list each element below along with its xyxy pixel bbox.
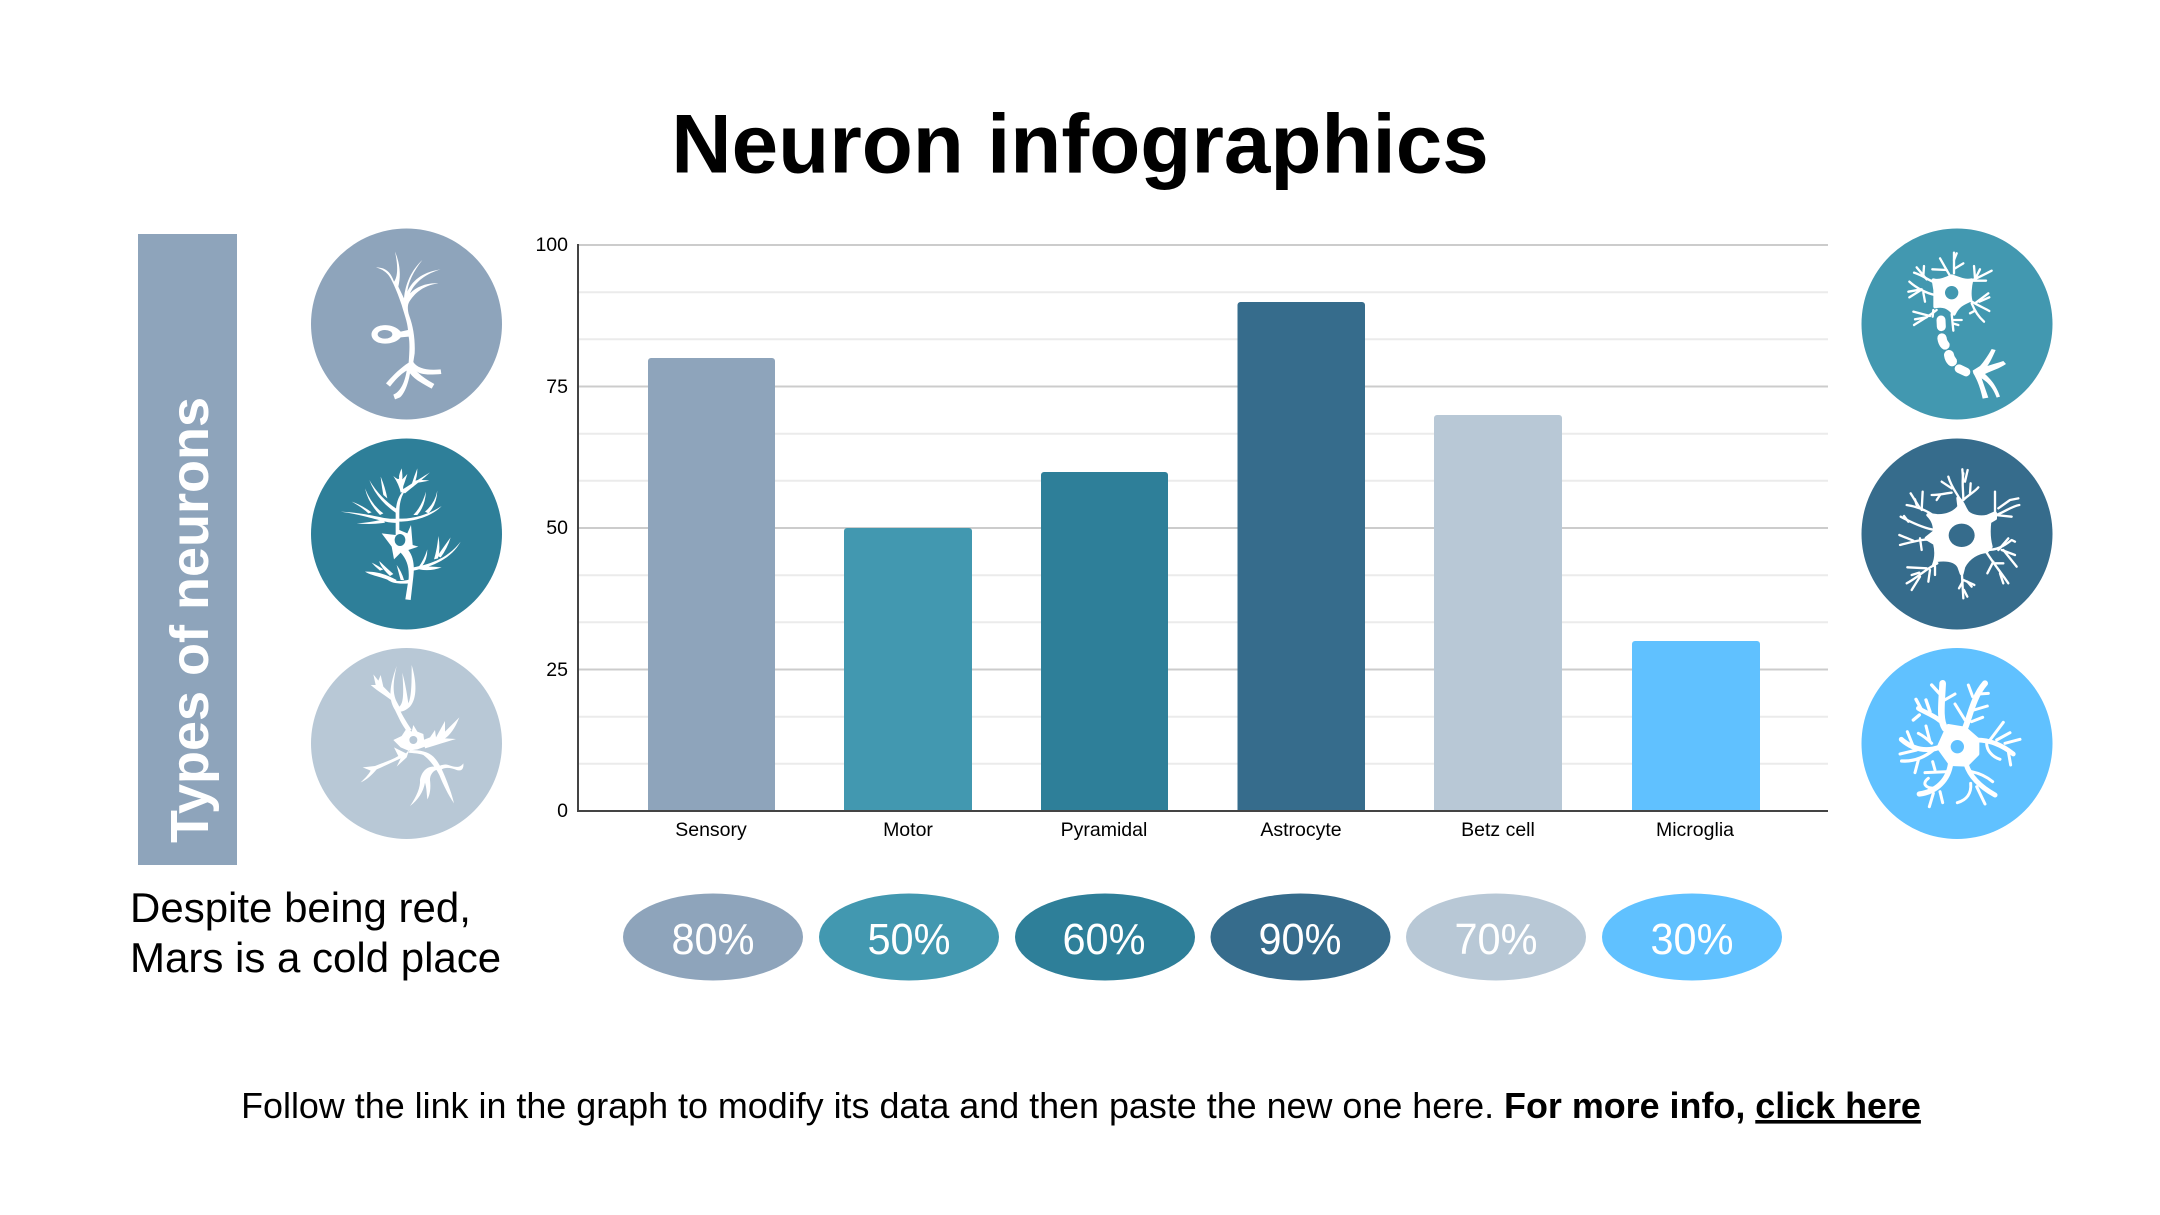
badge: 90%: 90% xyxy=(1258,915,1342,964)
icon: microglia xyxy=(1862,648,2052,839)
text block: Mars note xyxy=(130,884,501,981)
y axis labels: 25 xyxy=(546,659,568,681)
bar: Betz cell 70 xyxy=(1434,415,1562,811)
x axis labels: Motor xyxy=(883,819,933,841)
x axis labels: Microglia xyxy=(1656,819,1734,841)
text block: Mars note: Despite being red, xyxy=(130,884,471,931)
badge: 30%: 30% xyxy=(1650,915,1734,964)
x axis labels: Betz cell xyxy=(1461,819,1535,841)
bar: Astrocyte 90 xyxy=(1238,302,1365,811)
icon: betz cell xyxy=(311,648,502,839)
text block: Mars note: Mars is a cold place xyxy=(130,934,501,981)
bar: Motor 50 xyxy=(844,528,972,811)
footer text: Follow the link in the graph to modify its data and then paste the new one here. For more info, click here xyxy=(241,1086,1921,1126)
icon: sensory neuron xyxy=(311,228,502,420)
y axis labels: 100 xyxy=(535,234,568,256)
icon: astrocyte xyxy=(1862,438,2052,630)
x axis labels: Pyramidal xyxy=(1061,819,1147,841)
bar: Sensory 80 xyxy=(648,358,775,811)
title: Neuron infographics xyxy=(671,96,1489,190)
badge: 70%: 70% xyxy=(1454,915,1538,964)
badge: 50%: 50% xyxy=(868,915,950,964)
y axis labels: 75 xyxy=(546,376,568,398)
percent badges xyxy=(623,894,1782,980)
axes xyxy=(578,244,1828,811)
major grid lines xyxy=(578,245,1828,670)
badge: 50% xyxy=(819,894,999,980)
x axis labels: Astrocyte xyxy=(1260,819,1342,841)
y axis labels xyxy=(535,234,568,822)
bar: Pyramidal 60 xyxy=(1041,472,1168,811)
panel: types of neurons vertical banner xyxy=(138,234,237,865)
badge: 30% xyxy=(1602,894,1782,980)
y axis labels: 0 xyxy=(557,800,568,822)
bar: Microglia 30 xyxy=(1632,641,1760,811)
badge: 70% xyxy=(1406,894,1586,980)
banner label: Types of neurons xyxy=(160,397,220,843)
x axis labels: Sensory xyxy=(675,819,747,841)
badge: 80% xyxy=(623,894,803,980)
badge: 90% xyxy=(1210,894,1390,980)
icon: pyramidal neuron xyxy=(311,438,502,630)
y axis labels: 50 xyxy=(546,517,568,539)
minor grid lines xyxy=(578,292,1828,764)
badge: 80%: 80% xyxy=(672,915,754,964)
x axis labels xyxy=(675,819,1734,841)
badge: 60%: 60% xyxy=(1062,915,1146,964)
badge: 60% xyxy=(1015,894,1195,980)
icon: motor neuron xyxy=(1862,228,2052,420)
axon segments xyxy=(1941,320,1966,372)
chart: bar chart of neuron types xyxy=(535,234,1828,841)
